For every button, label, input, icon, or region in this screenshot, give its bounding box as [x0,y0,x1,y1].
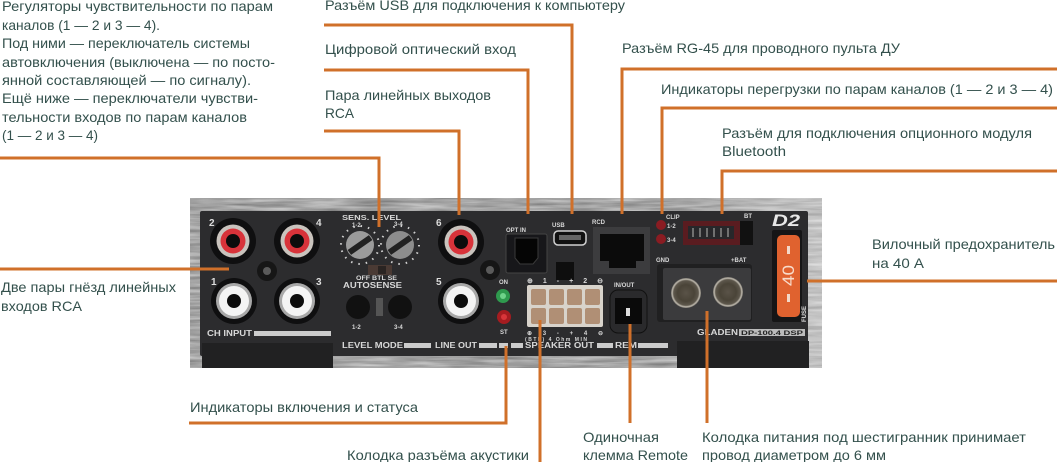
RCA input 3 [274,278,320,324]
speaker connector: (BTL) 4 Ohm MIN [525,337,587,343]
callout: RG-45 [622,40,1057,214]
callout: fuse [807,236,1057,281]
callout: Bluetooth: Разъём для подключения опционного модуля [722,125,1032,141]
callout: remote terminal [583,324,688,462]
silkscreen labels and bars: REM [615,341,637,350]
remote terminal: IN/OUT [614,283,635,289]
screws [257,260,500,281]
photo: amplifier panel [190,198,822,368]
silkscreen labels and bars: LINE OUT [435,341,477,350]
RCA input 1 [211,278,257,324]
callout: RCA outputs [324,87,491,215]
callout: power and status indicators: Индикаторы включения и статуса [190,399,418,415]
channel numbers: 5 [436,277,442,288]
power block [656,258,752,322]
text block: Ещё ниже — переключатели чувстви- [2,90,258,106]
text block: янной составляющей — по сигналу). [2,72,251,88]
callout: clip indicators: Индикаторы перегрузки по парам каналов (1 — 2 и 3 — 4) [661,81,1053,97]
status LEDs: ST [500,330,508,336]
level mode buttons [346,295,412,331]
model label: DP-100.4 DSP [741,331,803,337]
callout: Bluetooth: Bluetooth [722,143,786,159]
sens level label: SENS. LEVEL [342,215,402,222]
channel numbers: 3 [316,277,322,288]
fuse label: FUSE [802,306,808,322]
silkscreen labels and bars [207,329,668,350]
power block: GND [656,258,670,264]
sens level label: 1-2 [352,223,361,229]
clip indicators: 1-2 [667,224,676,230]
autosense switch: AUTOSENSE [343,281,403,290]
speaker connector [525,278,603,343]
RCA input 4 [274,218,320,264]
text block [2,0,275,143]
left mounting block [202,343,333,368]
D2 logo: D2 [772,211,801,230]
black front panel [200,211,808,356]
level mode buttons: 1-2 [352,325,361,331]
level mode buttons: 3-4 [394,325,403,331]
silkscreen labels and bars: SPEAKER OUT [525,341,594,350]
USB port: USB [552,223,565,229]
channel numbers: 6 [436,218,442,229]
channel numbers [209,218,442,288]
clip indicators [656,215,680,244]
channel numbers: 4 [316,218,322,229]
channel numbers: 2 [209,218,215,229]
callout: fuse: Вилочный предохранитель [872,236,1055,252]
callout: RCA outputs: Пара линейных выходов [325,87,491,103]
callout: optical input [324,41,528,214]
model label [697,328,805,337]
clip indicators: 3-4 [667,238,676,244]
Bluetooth connector: BT [744,214,752,220]
speaker connector: ⊕ 3 - + 4 ⊖ [527,331,603,337]
autosense switch: OFF BTL SE [356,276,397,282]
callout: RCA inputs: Две пары гнёзд линейных [1,279,176,295]
RCA output 6 [438,219,484,265]
remote terminal [610,283,647,333]
text block: Под ними — переключатель системы [2,35,250,51]
RCD port [592,220,650,274]
fuse holder [772,230,802,322]
callout: power block: Колодка питания под шестигранник принимает [702,429,1027,445]
leader line [0,158,379,227]
sens level label: 3-4 [394,222,403,228]
RCA input 2 [210,218,256,264]
power block: +BAT [731,258,747,264]
sensitivity knobs [341,226,419,264]
RCD port: RCD [592,220,606,226]
silkscreen labels and bars: LEVEL MODE [342,341,404,350]
text block: каналов (1 — 2 и 3 — 4). [2,17,160,33]
callout: Bluetooth [722,125,1057,214]
fuse 40 A [777,235,800,317]
model label: GLADEN [697,328,738,337]
callout: RCA inputs [0,269,229,314]
optical input: OPT IN [506,228,526,234]
callout: USB [324,0,625,214]
callout: RCA inputs: входов RCA [1,298,83,314]
callout: RCA outputs: RCA [325,105,355,121]
Bluetooth connector [683,214,753,245]
speaker connector: ⊕ 1 - + 2 ⊖ [527,278,603,285]
fuse 40 A: 40 [779,265,798,286]
clip indicators: CLIP [666,215,680,221]
callout: RG-45: Разъём RG-45 для проводного пульта ДУ [622,40,900,56]
callout: power block [702,311,1027,462]
metal chassis [190,198,822,368]
callout: sensitivity controls [0,0,379,227]
text block: автовключения (выключена — по посто- [2,54,275,70]
text block: (1 — 2 и 3 — 4) [2,127,98,143]
optical input [506,228,547,273]
text block: тельности входов по парам каналов [2,109,247,125]
channel numbers: 1 [211,277,217,288]
right mounting block [677,341,809,368]
callout: clip indicators [661,81,1057,214]
autosense switch [343,265,403,290]
sens level label [342,215,403,229]
callout: remote terminal: Одиночная [583,429,659,445]
silkscreen labels and bars: CH INPUT [207,329,252,338]
status LEDs [496,280,511,336]
USB port [552,223,586,245]
RCA output 5 [438,278,484,324]
chassis sheen [190,198,822,368]
square plug [556,262,574,280]
callout: fuse: на 40 А [872,255,925,271]
status LEDs: ON [499,280,508,286]
callout: optical input: Цифровой оптический вход [325,41,516,57]
callout: power and status indicators [189,346,506,423]
